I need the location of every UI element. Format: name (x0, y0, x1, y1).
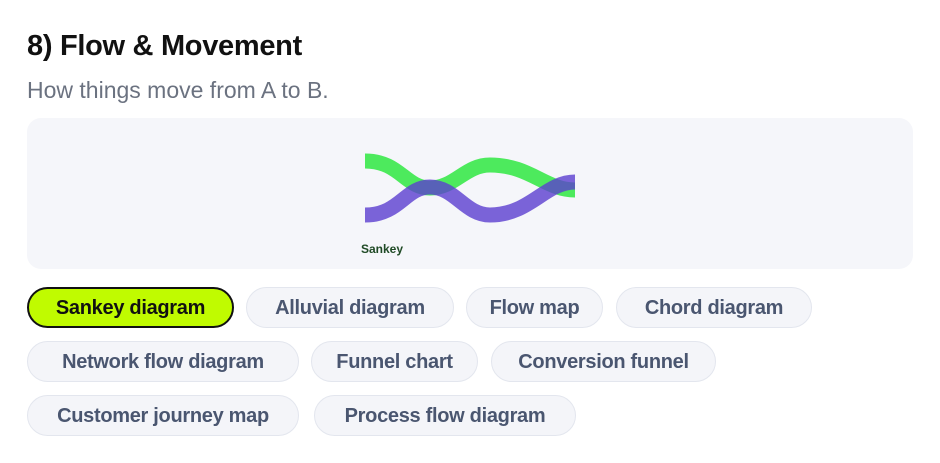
pill (311, 341, 478, 382)
panel: sankey preview (27, 118, 913, 269)
pill (246, 287, 454, 328)
pill: Customer journey map (57, 405, 269, 427)
pill selected (27, 287, 234, 328)
pill (616, 287, 812, 328)
label: Sankey: Sankey (361, 242, 403, 256)
pill (466, 287, 603, 328)
subtitle: How things move from A to B. (27, 77, 329, 103)
pill (491, 341, 716, 382)
pill: Alluvial diagram (275, 297, 425, 319)
pill (27, 395, 299, 436)
pill: Network flow diagram (62, 351, 264, 373)
pill: Funnel chart (336, 351, 453, 373)
pill: Flow map (490, 297, 579, 319)
title: 8) Flow & Movement (27, 30, 302, 62)
pill (314, 395, 576, 436)
pill selected: Sankey diagram (56, 297, 205, 319)
chart: sankey (365, 154, 575, 222)
pill: Process flow diagram (345, 405, 545, 427)
pill (27, 341, 299, 382)
pill: Chord diagram (645, 297, 783, 319)
pill: Conversion funnel (518, 351, 689, 373)
